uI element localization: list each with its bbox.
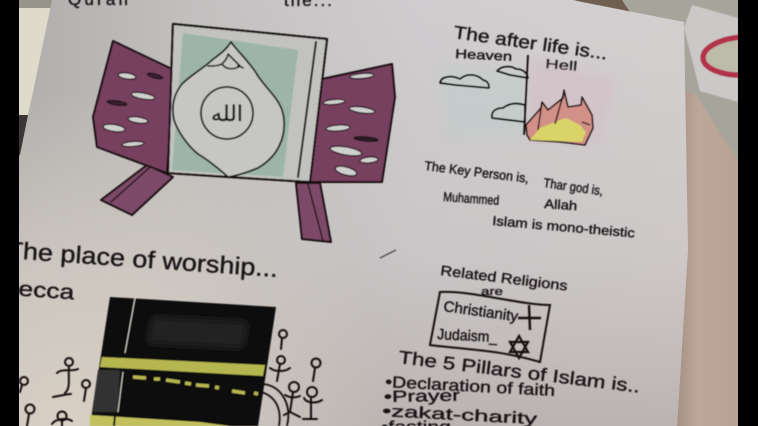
Christianity label: Christianity	[442, 298, 520, 325]
key person text	[424, 158, 530, 208]
god text	[543, 175, 604, 213]
circle with Allah calligraphy	[201, 87, 253, 139]
top cut-off heading	[68, 0, 332, 10]
door panel	[92, 370, 120, 412]
left page script marks	[103, 72, 163, 147]
note card with red ring	[684, 5, 758, 102]
afterlife heading: The after life is...	[452, 22, 609, 64]
icon: star of David	[510, 336, 528, 358]
key person text: The Key Person is,	[424, 158, 530, 186]
five pillars list: •zakat-charity	[382, 403, 537, 426]
gold band	[100, 357, 265, 376]
left strap	[101, 165, 173, 215]
are label: are	[481, 286, 503, 298]
Hell label: Hell	[545, 56, 578, 74]
five pillars list	[381, 374, 555, 426]
central page	[168, 24, 327, 182]
place of worship heading: The place of worship...	[6, 237, 279, 283]
lower gold band	[90, 415, 230, 426]
right strap	[296, 183, 331, 242]
left cover	[93, 41, 174, 173]
icon: cross	[518, 305, 541, 330]
left background	[19, 8, 52, 115]
god text: Allah	[544, 196, 578, 213]
gold dashes	[133, 377, 258, 394]
icon: open Quran drawing	[93, 24, 395, 242]
icon: Kaaba drawing	[90, 297, 276, 426]
related religions box	[430, 292, 550, 362]
heaven and hell drawing	[440, 55, 615, 145]
Heaven label: Heaven	[455, 46, 513, 64]
icon: open Quran drawing: الله	[211, 102, 243, 127]
handle arc	[261, 384, 288, 426]
medallion	[173, 42, 284, 177]
Judaism label: Judaism_	[437, 326, 498, 346]
right cover	[310, 64, 395, 182]
pen mark	[380, 250, 396, 258]
sweater background	[672, 90, 738, 426]
key person text: Muhammed	[443, 189, 500, 208]
clouds	[440, 67, 528, 122]
five pillars list: •Declaration of faith	[385, 374, 555, 400]
god text: Thar god is,	[543, 175, 604, 198]
related religions heading: Related Religions	[440, 262, 569, 294]
five pillars list: •Prayer	[384, 388, 461, 406]
green panel	[172, 33, 298, 177]
right page script marks	[323, 72, 378, 178]
stick figures	[20, 330, 322, 426]
flames	[526, 90, 593, 145]
monotheistic note: Islam is mono-theistic	[492, 213, 636, 241]
divider	[524, 55, 528, 135]
five pillars heading: The 5 Pillars of Islam is..	[398, 347, 641, 397]
